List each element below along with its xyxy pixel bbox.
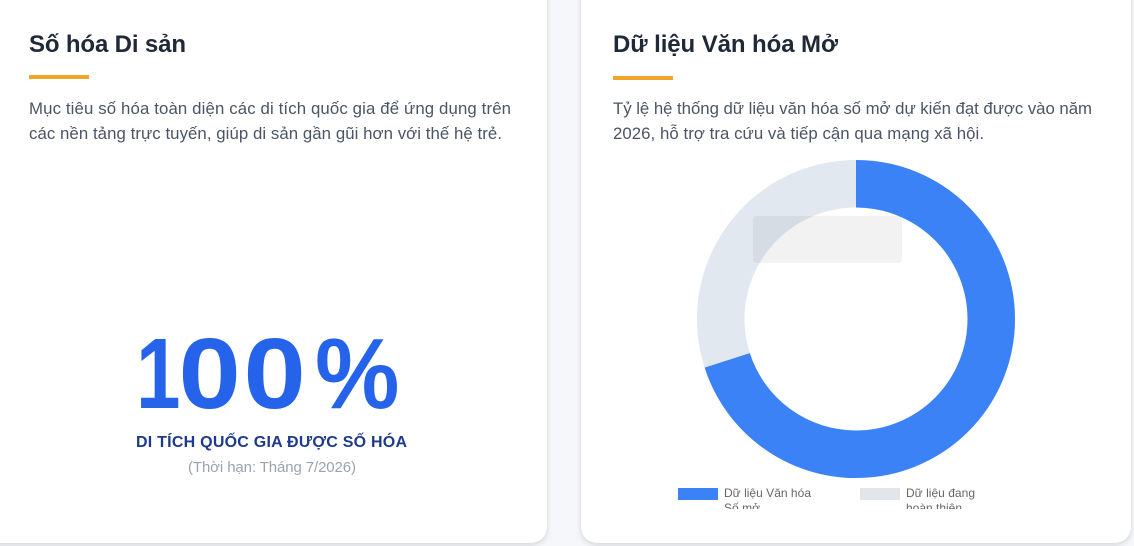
- big stat: 100%: %: [315, 318, 399, 430]
- heading: Dữ liệu Văn hóa Mở: Dữ liệu Văn hóa Mở: [613, 31, 839, 58]
- big stat: 100%: 0: [244, 319, 306, 430]
- big stat: 100%: 1: [136, 319, 180, 430]
- donut chart: [721, 184, 991, 454]
- stat label: DI TÍCH QUỐC GIA ĐƯỢC SỐ HÓA: [136, 431, 407, 451]
- text block: left description: các nền tảng trực tuyến, giúp di sản gần gũi hơn với thế hệ trẻ.: [29, 124, 502, 143]
- text block: right description: 2026, hỗ trợ tra cứu và tiếp cận qua mạng xã hội.: [613, 124, 984, 143]
- text block: right description: Tỷ lệ hệ thống dữ liệu văn hóa số mở dự kiến đạt được vào năm: [613, 99, 1092, 118]
- text block: left description: Mục tiêu số hóa toàn diện các di tích quốc gia để ứng dụng trên: [29, 99, 511, 118]
- accent bar right: [613, 76, 673, 80]
- legend: in progress: hoàn thiện: [906, 501, 962, 515]
- tooltip overlay: [753, 216, 902, 263]
- legend: in progress: [860, 486, 975, 515]
- big stat: 100%: [136, 318, 399, 430]
- panel: digitised heritage card: [0, 0, 547, 543]
- heading: Số hóa Di sản: Số hóa Di sản: [29, 31, 186, 58]
- text block: right description: [613, 99, 1092, 143]
- legend: open data: [678, 486, 811, 515]
- legend: in progress: Dữ liệu đang: [906, 486, 975, 500]
- big stat: 100%: 0: [178, 319, 241, 430]
- legend clip mask: [670, 509, 990, 521]
- legend: open data: Dữ liệu Văn hóa: [724, 486, 811, 500]
- stat note: (Thời hạn: Tháng 7/2026): [188, 459, 356, 476]
- legend: open data: Số mở: [724, 501, 760, 515]
- text block: left description: [29, 99, 511, 143]
- panel: open cultural data card: [581, 0, 1131, 543]
- accent bar left: [29, 75, 89, 79]
